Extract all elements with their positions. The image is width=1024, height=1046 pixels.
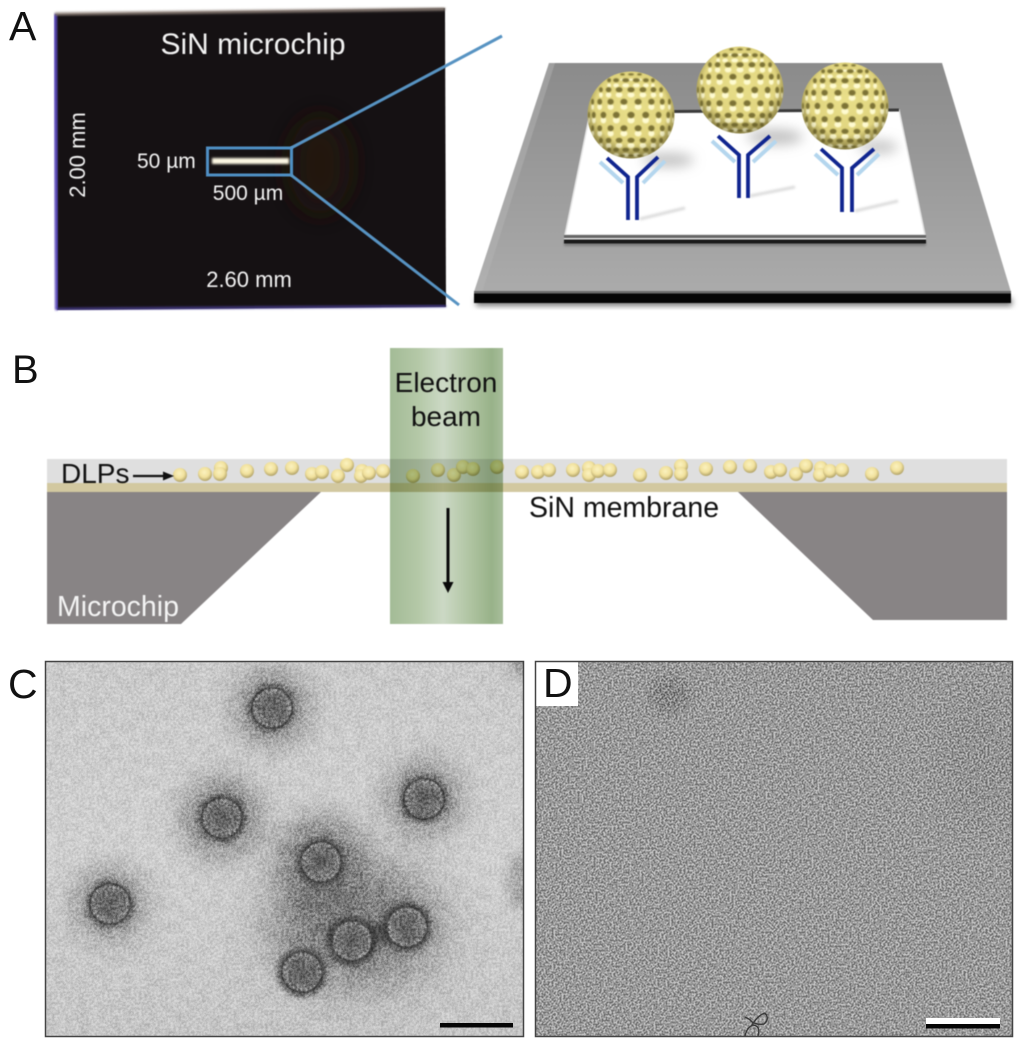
- antibody shadows: [640, 187, 898, 219]
- virus particle 2: [696, 46, 784, 137]
- scale bar: [440, 1023, 513, 1028]
- panel label D: D: [543, 660, 573, 706]
- panel label B: B: [12, 348, 39, 392]
- dimension: 2.00 mm: 2.00 mm: [65, 112, 90, 198]
- membrane window: [565, 110, 925, 235]
- label: SiN membrane: SiN membrane: [529, 492, 719, 524]
- virus particle 3: [802, 62, 888, 153]
- label: Microchip: Microchip: [57, 591, 179, 623]
- mottled texture: [69, 666, 522, 1022]
- dimension: 2.60 mm: 2.60 mm: [206, 267, 292, 292]
- arrow: DLPs pointer: [133, 472, 174, 480]
- dimension: 50 µm: 50 µm: [137, 150, 196, 173]
- panel label A: A: [9, 3, 37, 49]
- DLP particles: [173, 458, 904, 483]
- debris: [745, 1013, 767, 1036]
- membrane window slit: [212, 158, 289, 164]
- panel D frame: [536, 662, 1012, 1036]
- microchip left wedge: [47, 492, 321, 624]
- liquid layer: [47, 459, 1007, 484]
- panel C: negative-stain micrograph: [45, 649, 542, 1037]
- antibody 2: [712, 136, 776, 198]
- virus particle 1: [588, 72, 674, 162]
- label: Electron beam: beam: [411, 401, 481, 432]
- capsid spikes: [92, 690, 442, 990]
- panel label C: C: [8, 661, 38, 707]
- decorative edge: [55, 14, 57, 310]
- title: SiN microchip: SiN microchip: [160, 28, 346, 61]
- panel C frame: [46, 662, 524, 1036]
- panel B: cross-section schematic: [47, 348, 1007, 624]
- noise texture: [45, 661, 524, 1037]
- panel D: empty field micrograph: [535, 660, 1020, 1037]
- broad stain halos: [74, 649, 542, 985]
- window shadow: [564, 241, 926, 246]
- antibody 3: [815, 149, 879, 212]
- darker patches: [650, 677, 1020, 830]
- background: [45, 661, 524, 1037]
- background: [535, 661, 1013, 1037]
- virus particles: [89, 687, 445, 993]
- panel A: SiN microchip photograph: [55, 8, 446, 310]
- window front edge: [564, 235, 926, 244]
- microchip right wedge: [738, 492, 1007, 620]
- window top edge: [672, 110, 899, 112]
- tight halos: [86, 684, 448, 997]
- electron beam column: [390, 348, 503, 624]
- platform top: [474, 63, 1011, 292]
- panel A: 3D chip diagram: [474, 46, 1012, 306]
- zoom lines: [291, 36, 502, 305]
- dimension: 500 µm: 500 µm: [213, 182, 283, 205]
- SiN membrane layer: [47, 483, 1007, 492]
- antibody 1: [600, 157, 665, 220]
- label: Electron beam: Electron: [395, 367, 497, 398]
- platform front edge: [474, 292, 1011, 303]
- chip photo: [55, 8, 446, 310]
- drop shadow: [476, 298, 1012, 306]
- arrow: beam direction: [442, 508, 454, 593]
- highlight box: [208, 148, 292, 175]
- sphere shadows: [642, 129, 898, 167]
- scale bar: [926, 1018, 1000, 1028]
- platform left bevel: [474, 63, 555, 292]
- label: DLPs: DLPs: [61, 458, 129, 489]
- noise texture: [535, 661, 1013, 1037]
